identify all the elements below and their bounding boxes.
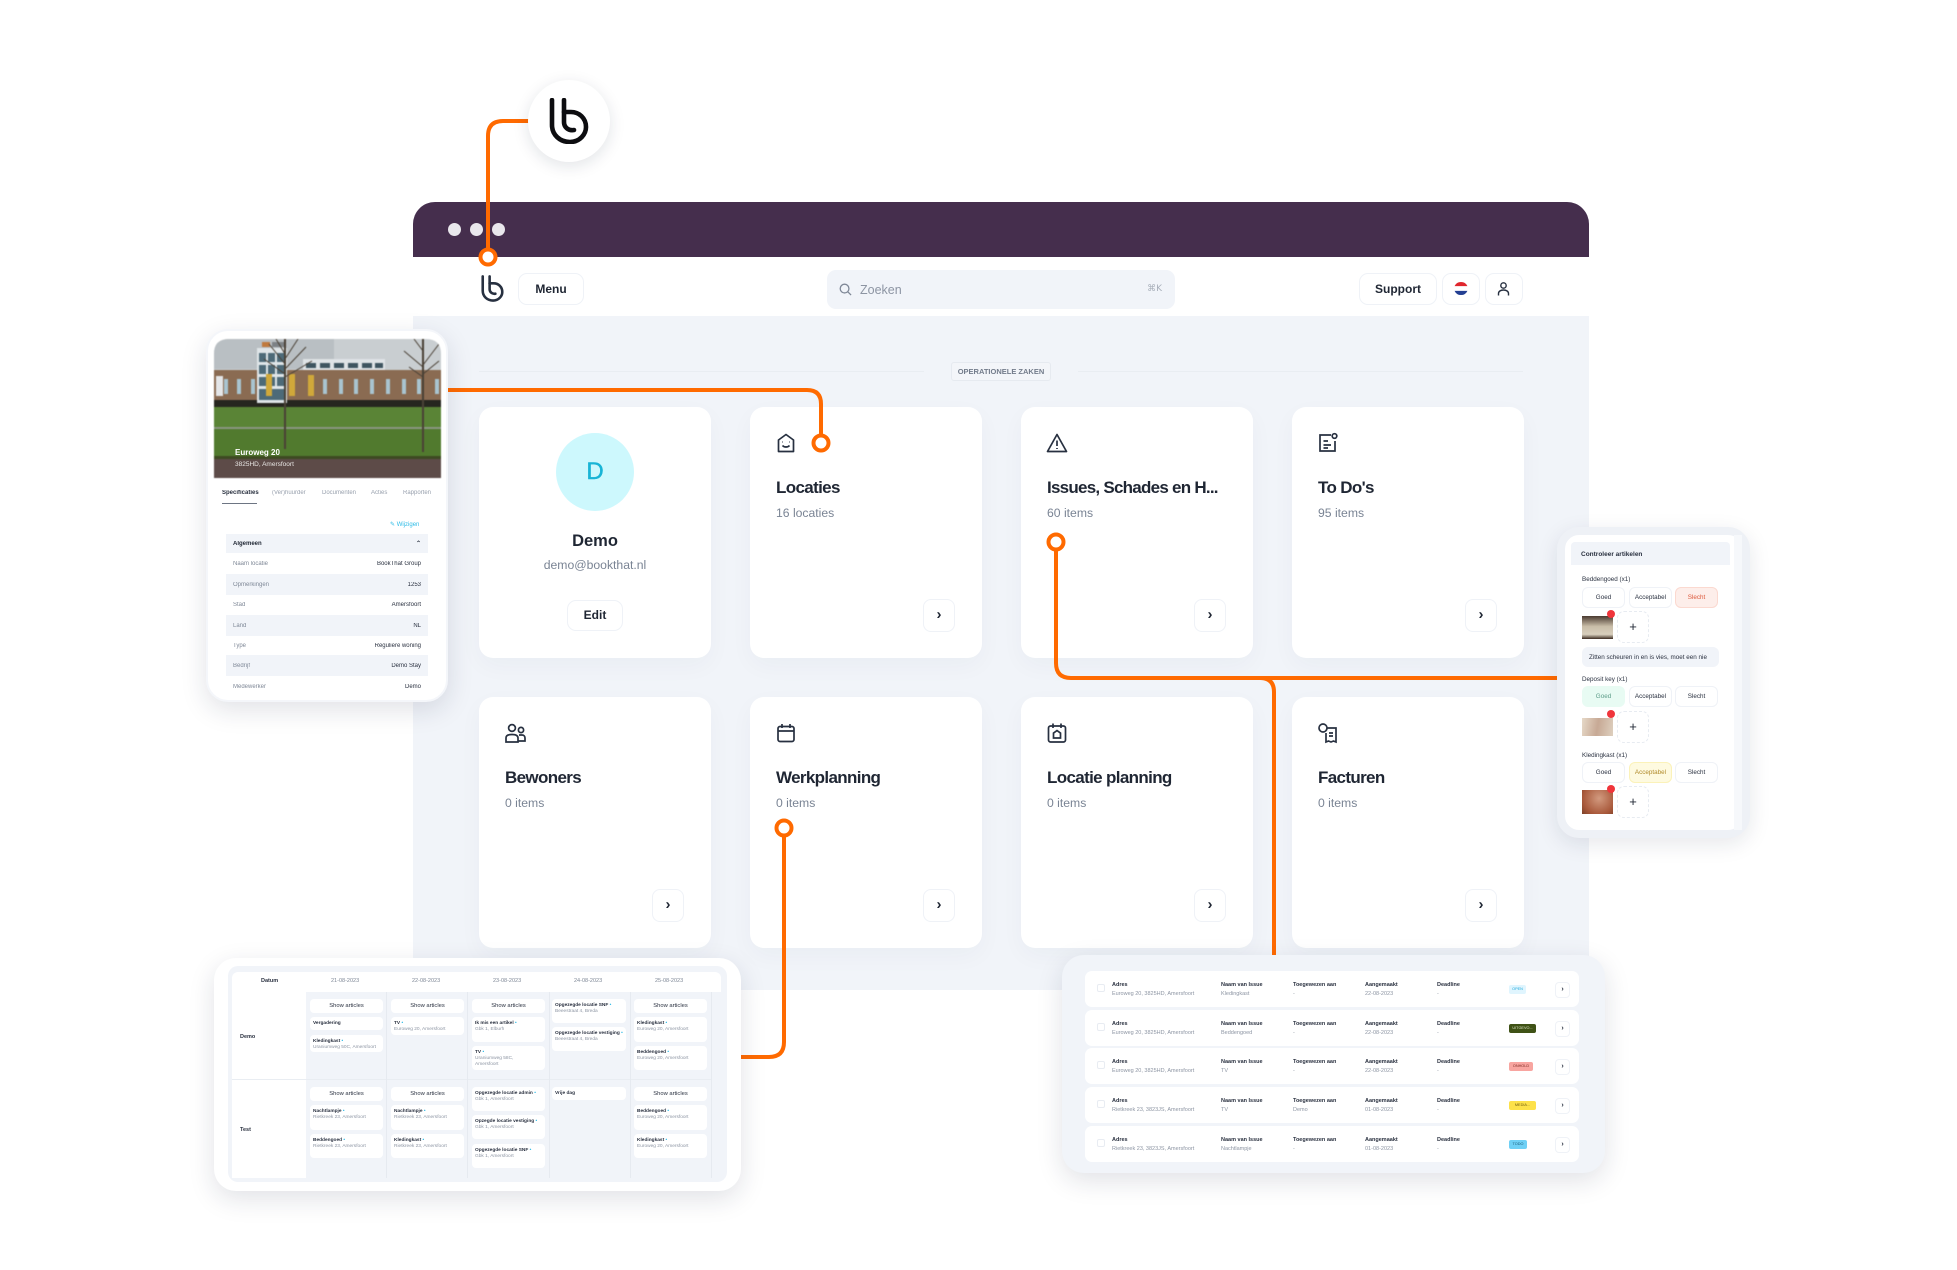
issue row 3 bbox=[1085, 1048, 1579, 1084]
issue row 1: Naam van Issue bbox=[1221, 982, 1263, 988]
issue row 3: Toegewezen aan bbox=[1293, 1058, 1336, 1064]
text: + bbox=[1629, 619, 1637, 634]
count: 0 items bbox=[776, 796, 815, 810]
text: 21-08-2023 bbox=[331, 978, 359, 984]
text: Specificaties bbox=[222, 490, 259, 496]
search placeholder: Zoeken bbox=[860, 283, 902, 297]
issue row 5: Toegewezen aan bbox=[1293, 1136, 1336, 1142]
title: Bewoners bbox=[505, 768, 581, 787]
section divider lines bbox=[479, 371, 924, 372]
issue row 2: Toegewezen aan bbox=[1293, 1020, 1336, 1026]
text: Test bbox=[240, 1127, 251, 1133]
count: 0 items bbox=[1318, 796, 1357, 810]
text: Demo Stay bbox=[391, 663, 421, 669]
text: Show articles bbox=[653, 1091, 688, 1097]
text: Beddengoed • bbox=[637, 1109, 669, 1114]
count: 0 items bbox=[505, 796, 544, 810]
card: issues bbox=[1021, 407, 1253, 658]
card: to do's bbox=[1292, 407, 1524, 658]
text: Beeestraat 4, Breda bbox=[555, 1009, 598, 1014]
text: Uraniumweg 50C, Amersfoort bbox=[313, 1045, 376, 1050]
text: TV • bbox=[475, 1050, 484, 1055]
card: bewoners bbox=[479, 697, 711, 948]
button: support bbox=[1359, 273, 1437, 305]
issue row 1: Euroweg 20, 3825HD, Amersfoort bbox=[1112, 991, 1194, 997]
icon: logo bbox=[550, 98, 588, 144]
connector: issues to panels bbox=[1048, 534, 1557, 956]
icon: user bbox=[1498, 282, 1510, 296]
arrow button: › bbox=[936, 896, 942, 913]
issue row 4: Adres bbox=[1112, 1098, 1128, 1104]
issue row 5: 01-08-2023 bbox=[1365, 1146, 1393, 1152]
issue row 2: › bbox=[1561, 1025, 1564, 1032]
issue row 5: Adres bbox=[1112, 1136, 1128, 1142]
text: Euroweg 20, Amersfoort bbox=[637, 1144, 688, 1149]
text: (Ver)huurder bbox=[272, 490, 306, 496]
panel: location details bbox=[198, 329, 456, 718]
text: Kledingkast • bbox=[637, 1021, 667, 1026]
text: Opgezegde locatie SNF • bbox=[475, 1148, 531, 1153]
issue row 5: › bbox=[1561, 1141, 1564, 1148]
arrow button: › bbox=[1478, 896, 1484, 913]
issue row 3: › bbox=[1561, 1063, 1564, 1070]
text: Deposit key (x1) bbox=[1582, 676, 1628, 683]
text: Documenten bbox=[322, 490, 356, 496]
issue row 4: Naam van Issue bbox=[1221, 1098, 1263, 1104]
issue row 1: - bbox=[1293, 991, 1295, 997]
text: + bbox=[1629, 794, 1637, 809]
count: 16 locaties bbox=[776, 506, 834, 520]
issue row 1: 22-08-2023 bbox=[1365, 991, 1393, 997]
photo: building bbox=[213, 338, 442, 479]
text: Euroweg 20, Amersfoort bbox=[637, 1056, 688, 1061]
count: 60 items bbox=[1047, 506, 1093, 520]
card: demo profile bbox=[479, 407, 711, 658]
title: Locatie planning bbox=[1047, 768, 1172, 787]
issue row 4: Aangemaakt bbox=[1365, 1098, 1398, 1104]
issue row 4: Deadline bbox=[1437, 1098, 1460, 1104]
issue row 5 bbox=[1085, 1126, 1579, 1162]
title: Locaties bbox=[776, 478, 840, 497]
button: support: Support bbox=[1375, 282, 1421, 296]
card: facturen bbox=[1292, 697, 1524, 948]
text: Opzegde locatie vestiging • bbox=[475, 1119, 537, 1124]
icon: invoice bbox=[1318, 723, 1337, 744]
photo caption: 3825HD, Amersfoort bbox=[235, 461, 294, 468]
articles header bbox=[1571, 542, 1730, 565]
text: Slecht bbox=[1688, 594, 1705, 601]
arrow button: › bbox=[1208, 896, 1212, 913]
issue row 1: Toegewezen aan bbox=[1293, 982, 1336, 988]
connector: location panel to locaties bbox=[448, 390, 828, 450]
edit link: ✎ Wijzigen bbox=[390, 522, 419, 528]
text: Nachtlampje • bbox=[313, 1109, 345, 1114]
issue row 1 bbox=[1085, 971, 1579, 1007]
article: kledingkast bbox=[1582, 752, 1718, 818]
issue row 4: Demo bbox=[1293, 1107, 1308, 1113]
issue row 5: Naam van Issue bbox=[1221, 1136, 1263, 1142]
section label bbox=[951, 362, 1051, 381]
calendar table bbox=[232, 972, 721, 1178]
text: Show articles bbox=[329, 1003, 364, 1009]
text: Amersfoort bbox=[475, 1062, 498, 1067]
article: beddengoed bbox=[1582, 576, 1719, 667]
title bar bbox=[413, 202, 1589, 257]
text: Zitten scheuren in en is vies, moet een nie bbox=[1589, 654, 1707, 661]
email: demo@bookthat.nl bbox=[544, 558, 646, 572]
text: Goed bbox=[1596, 769, 1611, 776]
title: Werkplanning bbox=[776, 768, 880, 787]
text: 24-08-2023 bbox=[574, 978, 602, 984]
top navigation bbox=[413, 257, 1589, 316]
text: Show articles bbox=[653, 1003, 688, 1009]
button: edit bbox=[567, 600, 623, 631]
issue row 5: TODO bbox=[1513, 1142, 1523, 1146]
text: Rietkreek 23, Amersfoort bbox=[313, 1115, 366, 1120]
arrow button bbox=[923, 889, 955, 922]
text: 23-08-2023 bbox=[493, 978, 521, 984]
icon: list bbox=[1319, 432, 1338, 452]
text: Rietkreek 23, Amersfoort bbox=[394, 1144, 447, 1149]
text: TV • bbox=[394, 1021, 403, 1026]
issue row 4: › bbox=[1561, 1102, 1564, 1109]
arrow button bbox=[1194, 599, 1226, 632]
text: Kledingkast • bbox=[394, 1138, 424, 1143]
text: Acceptabel bbox=[1635, 769, 1666, 776]
calendar entries: test row bbox=[310, 1087, 707, 1168]
text: Beddengoed • bbox=[313, 1138, 345, 1143]
text: Nachtlampje • bbox=[394, 1109, 426, 1114]
text: Kledingkast • bbox=[637, 1138, 667, 1143]
arrow button bbox=[652, 889, 684, 922]
issue row 1: Adres bbox=[1112, 982, 1128, 988]
search field bbox=[827, 270, 1175, 309]
text: Gbk 1, Amersfoort bbox=[475, 1125, 514, 1130]
issue row 3: - bbox=[1437, 1068, 1439, 1074]
issue row 3: Naam van Issue bbox=[1221, 1058, 1263, 1064]
text: Vergadering bbox=[313, 1021, 341, 1026]
count: 0 items bbox=[1047, 796, 1086, 810]
issue row 4 bbox=[1085, 1087, 1579, 1123]
issue row 5: - bbox=[1293, 1146, 1295, 1152]
text: Euroweg 20, Amersfoort bbox=[637, 1027, 688, 1032]
name: Demo bbox=[572, 532, 618, 550]
arrow button: › bbox=[666, 896, 670, 913]
text: Algemeen bbox=[233, 541, 262, 547]
issue row 1: Aangemaakt bbox=[1365, 982, 1398, 988]
browser window bbox=[413, 202, 1589, 990]
text: Euroweg 20, Amersfoort bbox=[637, 1115, 688, 1120]
text: Reguliere woning bbox=[375, 643, 421, 649]
button: user bbox=[1485, 273, 1523, 305]
text: ⌃ bbox=[416, 541, 421, 547]
tabs bbox=[222, 490, 431, 504]
button: edit: Edit bbox=[584, 608, 606, 622]
section label: OPERATIONELE ZAKEN bbox=[958, 367, 1044, 376]
issue row 3: 22-08-2023 bbox=[1365, 1068, 1393, 1074]
photo caption bbox=[235, 448, 294, 468]
icon: dutch flag bbox=[1454, 282, 1468, 295]
button: menu bbox=[518, 273, 584, 305]
issue row 4: 01-08-2023 bbox=[1365, 1107, 1393, 1113]
text: Goed bbox=[1596, 594, 1611, 601]
issue row 3: Deadline bbox=[1437, 1058, 1460, 1064]
arrow button bbox=[923, 599, 955, 632]
text: Kledingkast • bbox=[313, 1039, 343, 1044]
text: Ik mis een artikel • bbox=[475, 1021, 517, 1026]
text: Gbk 1, Elburh bbox=[475, 1027, 504, 1032]
text: Opgezegde locatie SNF • bbox=[555, 1003, 611, 1008]
issue row 4: MEDIA... bbox=[1515, 1103, 1530, 1107]
logo badge bbox=[528, 80, 610, 162]
icon: warning bbox=[1046, 434, 1068, 452]
text: Gbk 1, Amersfoort bbox=[475, 1097, 514, 1102]
text: Acties bbox=[371, 490, 387, 496]
issue row 3: TV bbox=[1221, 1068, 1228, 1074]
text: Gbk 1, Amersfoort bbox=[475, 1154, 514, 1159]
issue row 1: Kledingkast bbox=[1221, 991, 1249, 997]
text: Opmerkingen bbox=[233, 582, 269, 588]
text: Land bbox=[233, 623, 246, 629]
text: Vrije dag bbox=[555, 1091, 575, 1096]
calendar entries: demo row bbox=[310, 999, 707, 1070]
button: menu: Menu bbox=[535, 282, 567, 296]
issue row 2: Euroweg 20, 3825HD, Amersfoort bbox=[1112, 1030, 1194, 1036]
issue row 5: Nachtlampje bbox=[1221, 1146, 1252, 1152]
shortcut: ⌘K bbox=[1147, 284, 1162, 294]
issue row 2 bbox=[1085, 1010, 1579, 1046]
text: Demo bbox=[405, 684, 421, 690]
issue row 4: Toegewezen aan bbox=[1293, 1098, 1336, 1104]
text: Kledingkast (x1) bbox=[1582, 752, 1627, 759]
issue row 3: Euroweg 20, 3825HD, Amersfoort bbox=[1112, 1068, 1194, 1074]
text: Type bbox=[233, 643, 246, 649]
arrow button bbox=[1194, 889, 1226, 922]
icon: calendar with house bbox=[1048, 724, 1066, 743]
text: Show articles bbox=[329, 1091, 364, 1097]
text: Goed bbox=[1596, 693, 1611, 700]
card: werkplanning bbox=[750, 697, 982, 948]
issue row 1: - bbox=[1437, 991, 1439, 997]
count: 95 items bbox=[1318, 506, 1364, 520]
inner column edge bbox=[1734, 535, 1742, 830]
icon: search bbox=[840, 284, 852, 296]
text: NL bbox=[413, 623, 421, 629]
text: Beeestraat 4, Breda bbox=[555, 1037, 598, 1042]
text: Rietkreek 23, Amersfoort bbox=[394, 1115, 447, 1120]
issue row 4: TV bbox=[1221, 1107, 1228, 1113]
issue row 2: - bbox=[1293, 1030, 1295, 1036]
title: Issues, Schades en H... bbox=[1047, 478, 1218, 497]
issue row 3: Adres bbox=[1112, 1058, 1128, 1064]
icon: small logo bbox=[481, 275, 504, 302]
text: Demo bbox=[240, 1034, 255, 1040]
issue row 5: Rietkreek 23, 3823JS, Amersfoort bbox=[1112, 1146, 1194, 1152]
photo caption: Euroweg 20 bbox=[235, 448, 280, 457]
table: general details bbox=[226, 534, 428, 690]
title: To Do's bbox=[1318, 478, 1374, 497]
issue row 3: Aangemaakt bbox=[1365, 1058, 1398, 1064]
text: Datum bbox=[261, 978, 278, 984]
text: Naam locatie bbox=[233, 561, 268, 567]
issue row 2: - bbox=[1437, 1030, 1439, 1036]
issue row 5: - bbox=[1437, 1146, 1439, 1152]
text: 1253 bbox=[408, 582, 421, 588]
text: BookThat Group bbox=[377, 561, 421, 567]
icon: house bbox=[778, 434, 794, 452]
text: Show articles bbox=[491, 1003, 526, 1009]
issue row 5: Deadline bbox=[1437, 1136, 1460, 1142]
calendar background bbox=[228, 966, 727, 1182]
panel: check articles bbox=[1557, 527, 1750, 838]
card: locaties bbox=[750, 407, 982, 658]
issue row 2: Adres bbox=[1112, 1020, 1128, 1026]
arrow button bbox=[1465, 599, 1497, 632]
text: Show articles bbox=[410, 1003, 445, 1009]
text: Show articles bbox=[410, 1091, 445, 1097]
issue row 2: 22-08-2023 bbox=[1365, 1030, 1393, 1036]
icon: people bbox=[505, 724, 526, 743]
connector: logo to header bbox=[480, 121, 530, 264]
issue row 2: Aangemaakt bbox=[1365, 1020, 1398, 1026]
text: Rietkreek 23, Amersfoort bbox=[313, 1144, 366, 1149]
text: Uraniumweg 58C, bbox=[475, 1056, 513, 1061]
issue row 1: › bbox=[1561, 986, 1564, 993]
issue row 4: - bbox=[1437, 1107, 1439, 1113]
issue row 3: ONHOLD bbox=[1513, 1064, 1529, 1068]
issue row 2: Deadline bbox=[1437, 1020, 1460, 1026]
text: + bbox=[1629, 719, 1637, 734]
article: deposit key bbox=[1582, 676, 1718, 743]
icon: calendar bbox=[777, 724, 795, 742]
issue row 2: Beddengoed bbox=[1221, 1030, 1252, 1036]
issue row 2: Naam van Issue bbox=[1221, 1020, 1263, 1026]
button: language flag bbox=[1442, 273, 1480, 305]
text: 25-08-2023 bbox=[655, 978, 683, 984]
text: Euroweg 20, Amersfoort bbox=[394, 1027, 445, 1032]
arrow button: › bbox=[1208, 606, 1212, 623]
panel: issues list bbox=[1062, 955, 1605, 1173]
text: Acceptabel bbox=[1635, 594, 1666, 601]
issue row 5: Aangemaakt bbox=[1365, 1136, 1398, 1142]
avatar bbox=[556, 433, 634, 511]
issue row 1: Deadline bbox=[1437, 982, 1460, 988]
text: Beddengoed • bbox=[637, 1050, 669, 1055]
window dots bbox=[448, 223, 505, 236]
articles header: Controleer artikelen bbox=[1581, 551, 1642, 558]
text: Bedrijf bbox=[233, 663, 250, 669]
arrow button: › bbox=[936, 606, 942, 623]
text: Beddengoed (x1) bbox=[1582, 576, 1630, 583]
issue row 4: Rietkreek 23, 3823JS, Amersfoort bbox=[1112, 1107, 1194, 1113]
text: 22-08-2023 bbox=[412, 978, 440, 984]
title: Facturen bbox=[1318, 768, 1385, 787]
connector: planning to calendar panel bbox=[741, 820, 792, 1057]
arrow button: › bbox=[1478, 606, 1484, 623]
panel: work planning calendar bbox=[214, 958, 741, 1191]
arrow button bbox=[1465, 889, 1497, 922]
text: Opgezegde locatie vestiging • bbox=[555, 1031, 623, 1036]
text: Slecht bbox=[1688, 693, 1705, 700]
issue row 2: UITGEVO... bbox=[1512, 1026, 1533, 1030]
text: Acceptabel bbox=[1635, 693, 1666, 700]
card: locatie planning bbox=[1021, 697, 1253, 948]
issue row 3: - bbox=[1293, 1068, 1295, 1074]
text: Rapporten bbox=[403, 490, 431, 496]
text: Medewerker bbox=[233, 684, 266, 690]
text: Opgezegde locatie admin • bbox=[475, 1091, 536, 1096]
issue row 1: OPEN bbox=[1512, 987, 1523, 991]
text: Amersfoort bbox=[392, 602, 421, 608]
avatar: D bbox=[586, 458, 604, 485]
text: Slecht bbox=[1688, 769, 1705, 776]
text: Stad bbox=[233, 602, 245, 608]
